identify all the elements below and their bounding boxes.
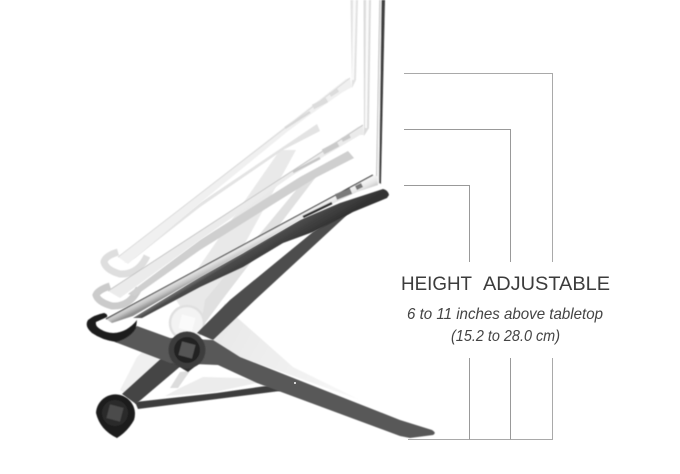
ghost: lower strut wedge <box>165 377 262 396</box>
heading: ADJUSTABLE <box>483 273 610 295</box>
heading <box>401 273 610 295</box>
ghost: faint rear strut <box>120 345 172 398</box>
subtext: inches: 6 to 11 inches above tabletop <box>407 306 603 323</box>
laptop ports <box>303 185 362 217</box>
ghost: pivot <box>170 306 204 340</box>
stand: upper leg <box>197 212 352 340</box>
stand: hook <box>87 313 137 342</box>
stand: back strut to foot <box>122 355 182 404</box>
laptop screen <box>376 0 385 184</box>
ghost laptop: middle position <box>108 0 371 298</box>
ghost laptop: highest position <box>118 0 358 264</box>
stand: rivet dot <box>294 382 296 384</box>
ghost: leg band from upper position <box>176 150 296 330</box>
ghost: leg band from middle position <box>200 177 316 330</box>
stand: central pivot <box>168 332 206 372</box>
laptop base <box>106 175 378 323</box>
ghost: support arm upper <box>124 124 320 263</box>
stand: base strut <box>135 384 280 409</box>
subtext: centimeters: (15.2 to 28.0 cm) <box>451 328 560 345</box>
dimension lines: height brackets <box>404 74 552 440</box>
ghost stand positions <box>96 124 360 400</box>
laptop: main position <box>106 0 385 323</box>
ghost: hook upper <box>104 252 147 274</box>
ghost: support arm middle <box>128 151 354 296</box>
stand: curved support arm <box>133 189 389 318</box>
stand: long front leg <box>115 326 435 438</box>
stand: foot pivot <box>96 394 135 438</box>
ghost: hook middle <box>96 286 139 306</box>
ghost: faint leg fan <box>210 303 360 400</box>
heading: HEIGHT <box>401 273 472 295</box>
